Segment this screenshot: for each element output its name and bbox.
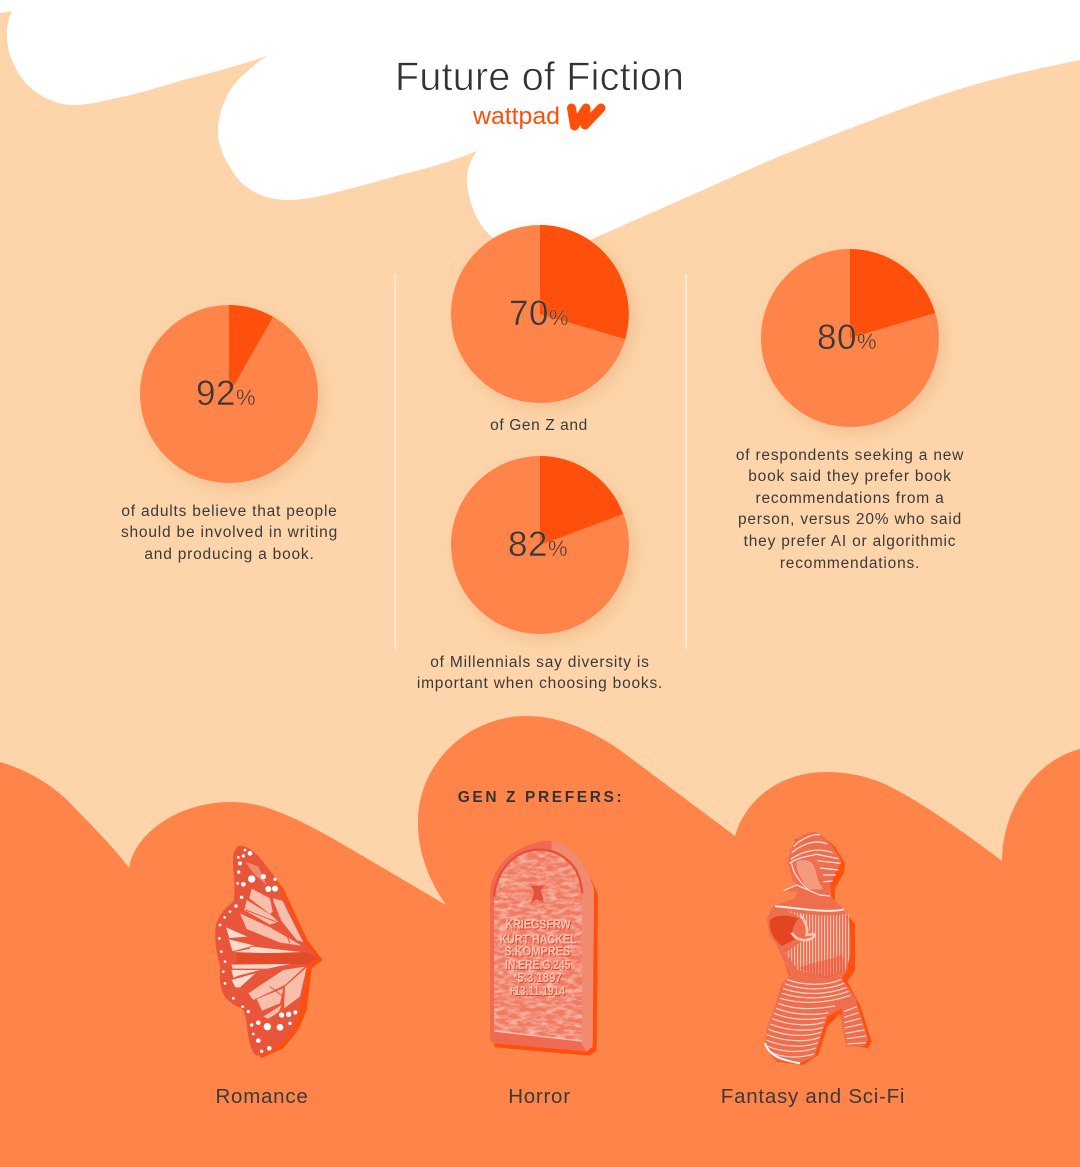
tombstone inscription: KRIEGSFRW [505, 916, 571, 931]
caption recommendations [736, 447, 964, 572]
white cloud header [0, 0, 1080, 240]
stat 82%: 82% [508, 525, 568, 564]
armor body [765, 832, 868, 1063]
tombstone inscription: IN.ERE.G.245 [505, 957, 571, 972]
butterfly wings [215, 846, 318, 1056]
wing tip blush [245, 862, 267, 885]
pie chart 80% [761, 249, 939, 427]
caption millennials: important when choosing books. [417, 675, 663, 692]
caption recommendations: of respondents seeking a new [736, 447, 964, 464]
tombstone inscription [499, 916, 577, 998]
tombstone cross [531, 885, 544, 903]
tombstone inscription: *5.3.1897 [513, 971, 562, 985]
caption adults: and producing a book. [144, 546, 315, 563]
caption recommendations: book said they prefer book [748, 468, 952, 485]
caption adults [121, 503, 338, 563]
caption millennials: of Millennials say diversity is [430, 654, 650, 671]
breastplate ribs [785, 910, 851, 977]
tombstone base line [494, 1031, 582, 1041]
caption recommendations: person, versus 20% who said [738, 511, 962, 528]
icon: butterfly [215, 846, 323, 1058]
icon: knight armor [765, 832, 872, 1065]
heading gen z prefers: GEN Z PREFERS: [458, 789, 624, 806]
armor arm opening [770, 916, 798, 946]
helmet ridges [783, 835, 841, 896]
butterfly veins [233, 898, 290, 997]
butterfly body [237, 953, 318, 964]
caption adults: of adults believe that people [121, 503, 338, 520]
butterfly shadow [247, 850, 323, 1058]
tombstone inscription: KURT HACKEL [499, 931, 577, 946]
icon: tombstone [490, 841, 598, 1056]
tasset bands [766, 979, 867, 1057]
armor edge highlight [765, 1043, 800, 1063]
caption recommendations: recommendations. [780, 555, 920, 572]
wattpad logo [472, 103, 601, 130]
caption gen z: of Gen Z and [490, 417, 588, 434]
tombstone shadow [494, 863, 598, 1056]
panel: recommendations [736, 249, 964, 572]
armor collar band [775, 906, 844, 911]
label romance: Romance [216, 1085, 308, 1108]
stat 92%: 92% [196, 374, 256, 413]
label horror: Horror [508, 1085, 571, 1108]
label fantasy and sci-fi: Fantasy and Sci-Fi [721, 1085, 905, 1108]
wattpad W icon [572, 108, 601, 126]
breastplate shading [798, 953, 846, 978]
pie chart 82% [451, 456, 629, 634]
tombstone inner arch [494, 850, 582, 897]
title: Future of Fiction [395, 55, 684, 99]
stat 70%: 70% [509, 294, 568, 333]
caption millennials [417, 654, 663, 692]
caption recommendations: they prefer AI or algorithmic [744, 533, 956, 550]
helmet cheek [796, 860, 823, 889]
tombstone face [494, 850, 582, 1042]
caption adults: should be involved in writing [121, 524, 338, 541]
caption recommendations: recommendations from a [755, 490, 945, 507]
wing dots [218, 849, 297, 1053]
armor shadow [768, 834, 872, 1065]
tombstone side [552, 841, 594, 1052]
wing panels [226, 889, 307, 1019]
pie chart 70% [451, 225, 629, 403]
panel: 92% of adults [121, 305, 338, 563]
tombstone inscription: +13.11.1914 [508, 984, 565, 998]
tombstone inscription: S.KOMPRES [504, 943, 570, 958]
tombstone rim [490, 841, 594, 1052]
stat 80%: 80% [817, 318, 876, 357]
armor pauldron strap [792, 915, 814, 940]
panel: diversity [417, 225, 663, 692]
divider [394, 274, 396, 649]
pie chart 92% [140, 305, 318, 483]
orange wave footer [0, 716, 1080, 1167]
wattpad wordmark: wattpad [472, 103, 560, 130]
